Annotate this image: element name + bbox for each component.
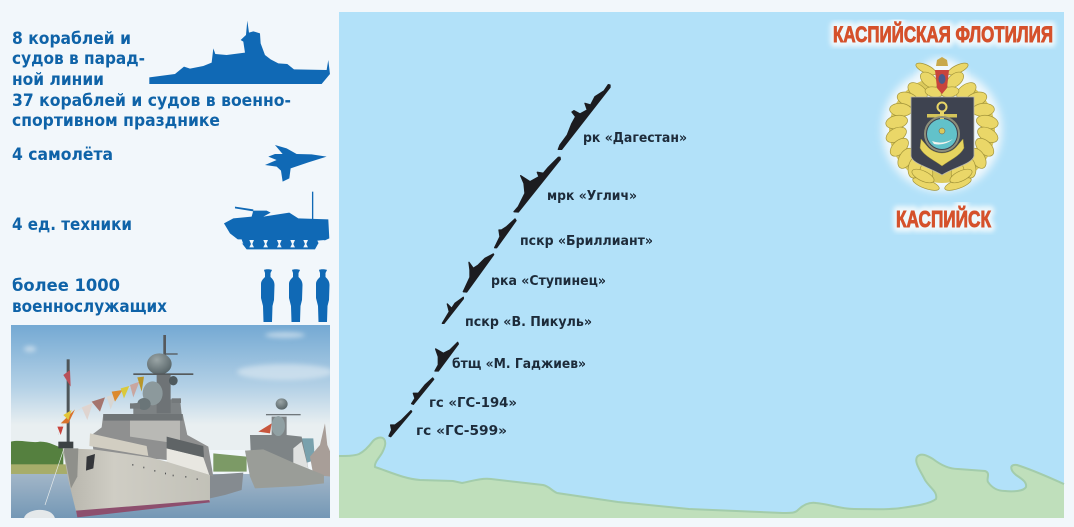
- hull: [63, 448, 210, 517]
- front ship superstructure: [89, 398, 213, 477]
- trees and bank: [11, 441, 247, 475]
- ship name labels: бтщ «М. Гаджиев»: [452, 357, 586, 372]
- water: [11, 474, 331, 519]
- coastline: [339, 438, 1064, 513]
- heading: Kaspiysk: КАСПИЙСК: [896, 205, 992, 232]
- text: personnel count: [12, 276, 167, 316]
- ship name labels: гс «ГС-599»: [416, 424, 507, 439]
- ship: Brilliant: [495, 219, 516, 248]
- ship name labels: гс «ГС-194»: [429, 396, 517, 411]
- text: personnel count: более 1000: [12, 276, 120, 295]
- text: ships in sports festival: [12, 91, 291, 130]
- ship name labels: пскр «В. Пикуль»: [465, 315, 592, 330]
- crown and red eagle: [935, 57, 949, 94]
- icon: flotilla emblem: [877, 57, 1007, 195]
- text: ships in parade line: 8 кораблей и: [12, 29, 131, 48]
- ship: Pikul: [442, 297, 463, 323]
- sky: [11, 325, 330, 450]
- land: [339, 438, 1064, 518]
- text: aircraft count: 4 самолёта: [12, 145, 113, 164]
- domes and mast: [58, 335, 193, 448]
- photo: warships at anchor: [11, 325, 333, 519]
- text: ships in parade line: ной линии: [12, 70, 104, 89]
- ship name labels: [416, 131, 687, 439]
- ship: Gadzhiev: [435, 342, 458, 371]
- text: ships in parade line: судов в парад-: [12, 49, 145, 68]
- icon: three servicemen: [261, 269, 330, 322]
- ship: Uglich: [514, 157, 560, 212]
- rear ship: [245, 398, 331, 488]
- panel: parade statistics: [12, 21, 330, 322]
- ship name labels: пскр «Бриллиант»: [520, 234, 653, 249]
- clouds: [24, 332, 333, 380]
- text: vehicle count: 4 ед. техники: [12, 215, 132, 234]
- ship: GS-599: [389, 411, 412, 437]
- text: ships in parade line: [12, 29, 145, 89]
- front ship stern: [208, 473, 243, 498]
- text: ships in sports festival: спортивном празднике: [12, 111, 220, 130]
- buoy: [24, 448, 64, 518]
- icon: armoured vehicle: [224, 192, 329, 249]
- ship: GS-194: [412, 378, 434, 404]
- icon: warship silhouette: [149, 21, 330, 84]
- ship: Stupinets: [463, 254, 494, 292]
- panel: map: [339, 12, 1064, 518]
- anchor: [920, 102, 964, 166]
- ship name labels: рка «Ступинец»: [491, 274, 606, 289]
- text: ships in sports festival: 37 кораблей и судов в военно-: [12, 91, 291, 110]
- sea: [339, 12, 1064, 518]
- icon: fighter jet: [265, 145, 327, 182]
- ship: Dagestan: [558, 85, 610, 149]
- ship line: eight vessels: [389, 85, 610, 437]
- ship name labels: мрк «Углич»: [547, 189, 637, 204]
- heading: Kaspiysk: КАСПИЙСК: [896, 205, 992, 232]
- shield: [911, 97, 974, 175]
- signal flags: [57, 377, 144, 435]
- text: personnel count: военнослужащих: [12, 297, 167, 316]
- portholes: [132, 464, 198, 480]
- ship name labels: рк «Дагестан»: [583, 131, 687, 146]
